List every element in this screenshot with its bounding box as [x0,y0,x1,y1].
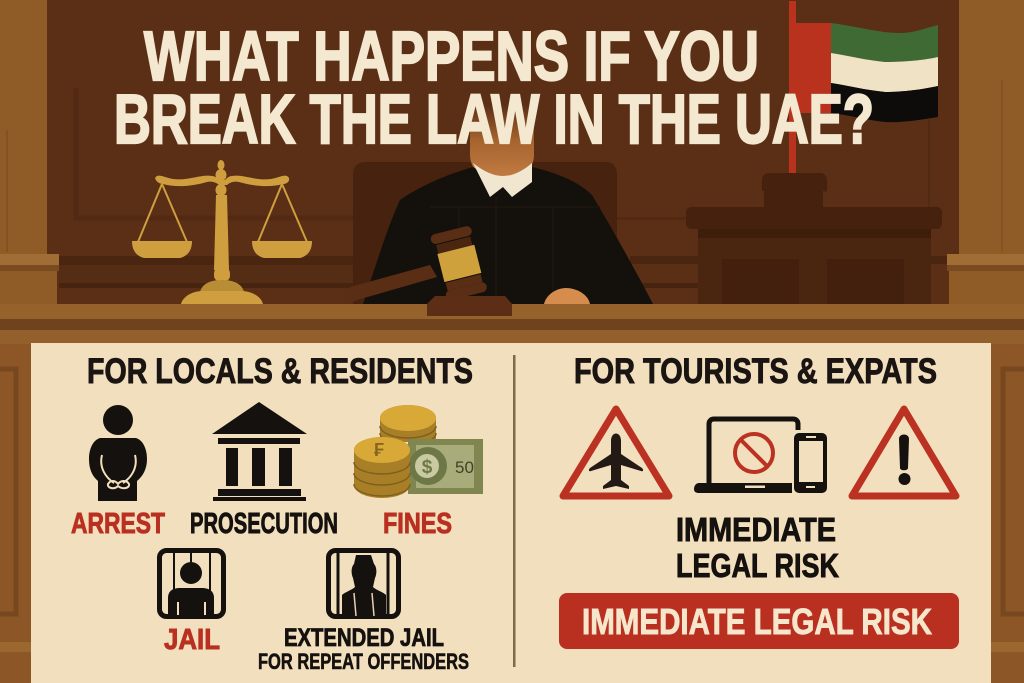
judge bench [0,304,1024,652]
icon: courthouse [212,402,307,501]
heading: tourists: FOR TOURISTS & EXPATS [574,352,937,391]
label: jail: JAIL [164,624,220,656]
label: fines: FINES [383,508,452,540]
UAE flag [789,1,938,173]
judge face [470,105,534,183]
icon: gavel [343,225,512,316]
panel: for tourists and expats [559,352,959,649]
side table with flag stand [686,173,942,304]
icon: devices with prohibition sign [694,419,827,493]
judge chair [353,162,617,304]
label: for repeat offenders: FOR REPEAT OFFENDERS [258,649,469,674]
icon: warning triangle [852,409,956,496]
title [114,17,874,158]
icon: jail [160,550,224,616]
icon: extended jail [328,550,398,616]
icon: coins and banknote [354,405,483,498]
icon: scales of justice [132,160,312,304]
panel: for locals and residents [71,352,483,674]
icon: coins and banknote: $ [422,457,433,478]
callout: immediate legal risk: IMMEDIATE LEGAL RISK [582,601,932,642]
label: prosecution: PROSECUTION [190,508,338,540]
icon: travel warning [563,409,669,496]
label: immediate legal risk: IMMEDIATE [676,511,836,548]
heading: locals: FOR LOCALS & RESIDENTS [87,352,473,391]
callout: immediate legal risk [559,593,959,649]
icon: arrest [89,405,147,501]
label: immediate legal risk [676,511,839,584]
right pillar [947,0,1024,304]
title: WHAT HAPPENS IF YOU [144,17,759,95]
icon: coins and banknote: ₣ [374,440,384,460]
label: immediate legal risk: LEGAL RISK [676,547,839,584]
panel: information card [31,343,991,683]
judge hand [544,288,590,304]
label: arrest: ARREST [71,508,165,540]
divider [513,355,516,667]
judge figure [363,105,653,304]
left pillar [0,0,59,304]
label: extended jail: EXTENDED JAIL [284,624,444,652]
judge robe [363,167,653,304]
icon: coins and banknote: 50 [455,458,474,477]
judge collar [473,163,532,197]
